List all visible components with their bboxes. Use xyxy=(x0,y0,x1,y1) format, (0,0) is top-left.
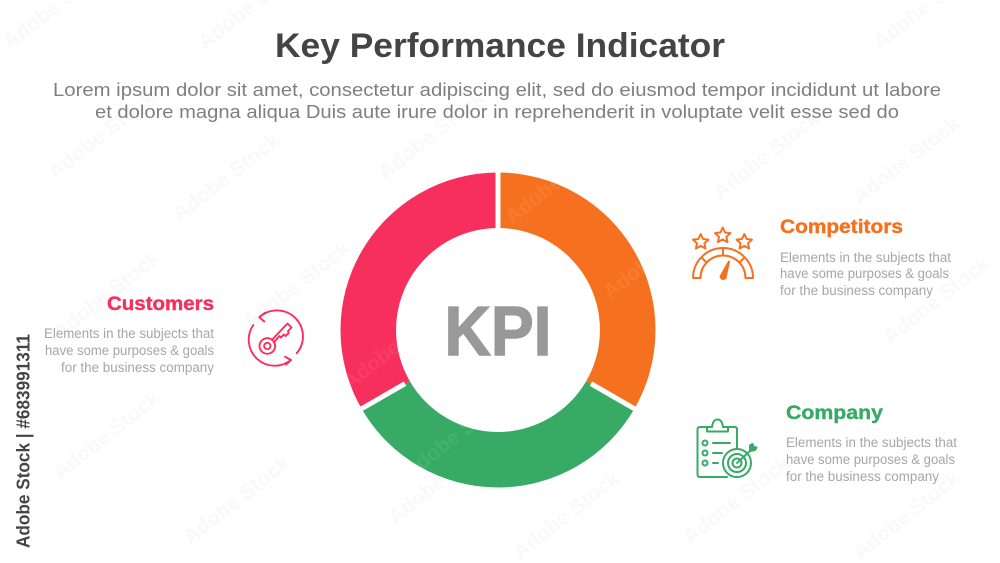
description: competitors: for the business company xyxy=(780,283,933,298)
description: competitors xyxy=(780,250,951,298)
text: Adobe Stock xyxy=(239,237,354,334)
donut chart xyxy=(339,132,714,488)
title: Key Performance Indicator xyxy=(275,27,725,65)
donut chart: Adobe Stock xyxy=(599,207,714,304)
donut chart: Adobe Stock xyxy=(339,297,454,394)
subtitle text xyxy=(53,79,941,122)
description: competitors: have some purposes & goals xyxy=(780,266,949,281)
text: Adobe Stock xyxy=(169,129,284,226)
text: Adobe Stock xyxy=(49,247,164,344)
description: company: for the business company xyxy=(786,469,939,484)
segment: green xyxy=(362,381,634,488)
donut chart: Adobe Stock xyxy=(399,387,514,484)
text: Adobe Stock xyxy=(179,452,294,549)
heading: competitors: Competitors xyxy=(780,216,903,238)
text: Adobe Stock xyxy=(374,87,489,184)
description: customers: have some purposes & goals xyxy=(45,343,214,358)
heading: customers: Customers xyxy=(107,293,214,315)
text: Adobe Stock xyxy=(49,387,164,484)
text: Adobe Stock xyxy=(384,432,499,529)
panel: company xyxy=(698,402,957,484)
description: competitors: Elements in the subjects that xyxy=(780,250,951,265)
panel: customers xyxy=(44,293,303,375)
panel: competitors xyxy=(693,216,951,298)
text: Adobe Stock xyxy=(44,87,159,184)
stock credit text: Adobe Stock | #683991311 xyxy=(14,334,34,548)
description: company: have some purposes & goals xyxy=(786,452,955,467)
text: Adobe Stock xyxy=(709,107,824,204)
text: Adobe Stock xyxy=(879,252,994,349)
heading: company: Company xyxy=(786,402,883,424)
description: company xyxy=(786,435,957,484)
text: Adobe Stock xyxy=(849,467,964,563)
icon: key with cycle arrows xyxy=(249,310,303,366)
description: customers xyxy=(44,326,214,375)
description: customers: for the business company xyxy=(61,360,214,375)
center label: KPI: KPI xyxy=(444,292,552,370)
text: Adobe Stock xyxy=(679,452,794,549)
subtitle text: et dolore magna aliqua Duis aute irure dolor in reprehenderit in voluptate velit esse sed do xyxy=(95,101,899,122)
text: Adobe Stock xyxy=(849,112,964,209)
icon: gauge with stars xyxy=(693,228,753,279)
description: company: Elements in the subjects that xyxy=(786,435,957,450)
icon: clipboard with target xyxy=(698,420,756,477)
segment: orange xyxy=(498,172,656,409)
subtitle text: Lorem ipsum dolor sit amet, consectetur adipiscing elit, sed do eiusmod tempor incididunt ut labore xyxy=(53,79,941,100)
donut chart: Adobe Stock xyxy=(501,132,616,229)
text: Adobe Stock xyxy=(509,467,624,563)
segment: red xyxy=(340,172,498,409)
description: customers: Elements in the subjects that xyxy=(44,326,214,341)
